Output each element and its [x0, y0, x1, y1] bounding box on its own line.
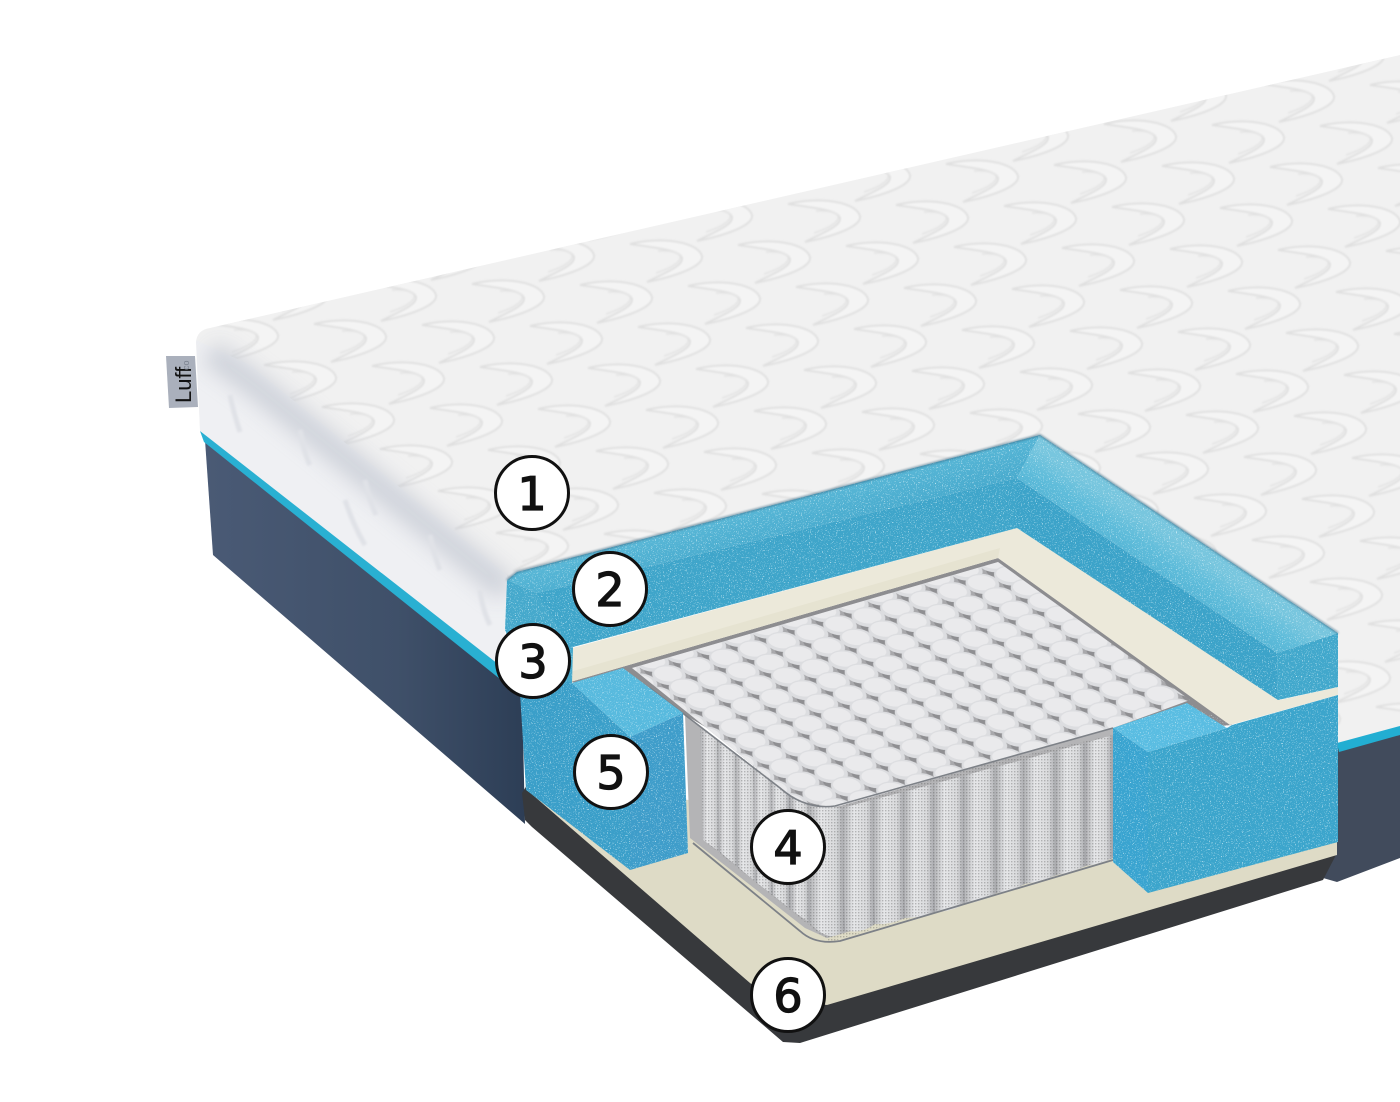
foam top surface, right bar	[1017, 435, 1338, 653]
callout 6: 6	[773, 969, 803, 1023]
mattress cutaway infographic	[166, 55, 1400, 1043]
spring top	[632, 562, 1190, 808]
layer 6: cream bottom foam	[527, 790, 1337, 1005]
brand tag: Luff	[171, 366, 196, 403]
foam inner wall, back	[537, 478, 1017, 683]
callout 4	[752, 810, 824, 884]
foam front left	[505, 580, 572, 690]
layer 2: top blue foam	[505, 435, 1338, 700]
callout 3: 3	[518, 635, 548, 689]
pocket mesh texture	[700, 728, 1113, 942]
foam speckle	[495, 425, 1345, 905]
callout 3	[496, 624, 570, 698]
torn cover edge around foam	[507, 435, 1338, 633]
callout 5: 5	[596, 746, 626, 800]
foam inner wall, right	[1017, 478, 1278, 700]
callout 2	[574, 552, 646, 626]
shadow behind spring top	[570, 558, 1232, 806]
callout 2: 2	[595, 563, 625, 617]
spring side backing	[685, 715, 1113, 938]
callout 6	[752, 958, 824, 1032]
teal stripe right	[1337, 726, 1400, 752]
layer 6: dark base under bottom foam	[522, 785, 1337, 1043]
foam front end	[1277, 633, 1338, 700]
callout 4: 4	[773, 821, 803, 875]
spring pockets	[700, 728, 1113, 936]
brand tag	[166, 356, 198, 408]
layer 3: cream top foam	[565, 528, 1338, 725]
callout 1: 1	[517, 467, 547, 521]
layer 5: right blue foam rail	[1113, 695, 1338, 893]
mattress outer base: dark fabric side right	[1323, 730, 1400, 882]
teal stripe left	[200, 431, 512, 683]
callout 1	[496, 456, 568, 530]
bottom frame wire	[693, 843, 1113, 942]
top frame wire	[650, 688, 1113, 807]
foam top surface, back bar	[507, 435, 1040, 593]
callout 5	[574, 736, 648, 808]
quilted white cover	[190, 50, 1400, 750]
layer 4: pocket spring unit	[632, 562, 1190, 942]
brand tag: co	[181, 360, 191, 370]
mattress outer base: dark fabric side left	[205, 440, 525, 824]
cover side face shading	[196, 340, 507, 678]
layer 5: left blue foam rail	[518, 660, 688, 870]
